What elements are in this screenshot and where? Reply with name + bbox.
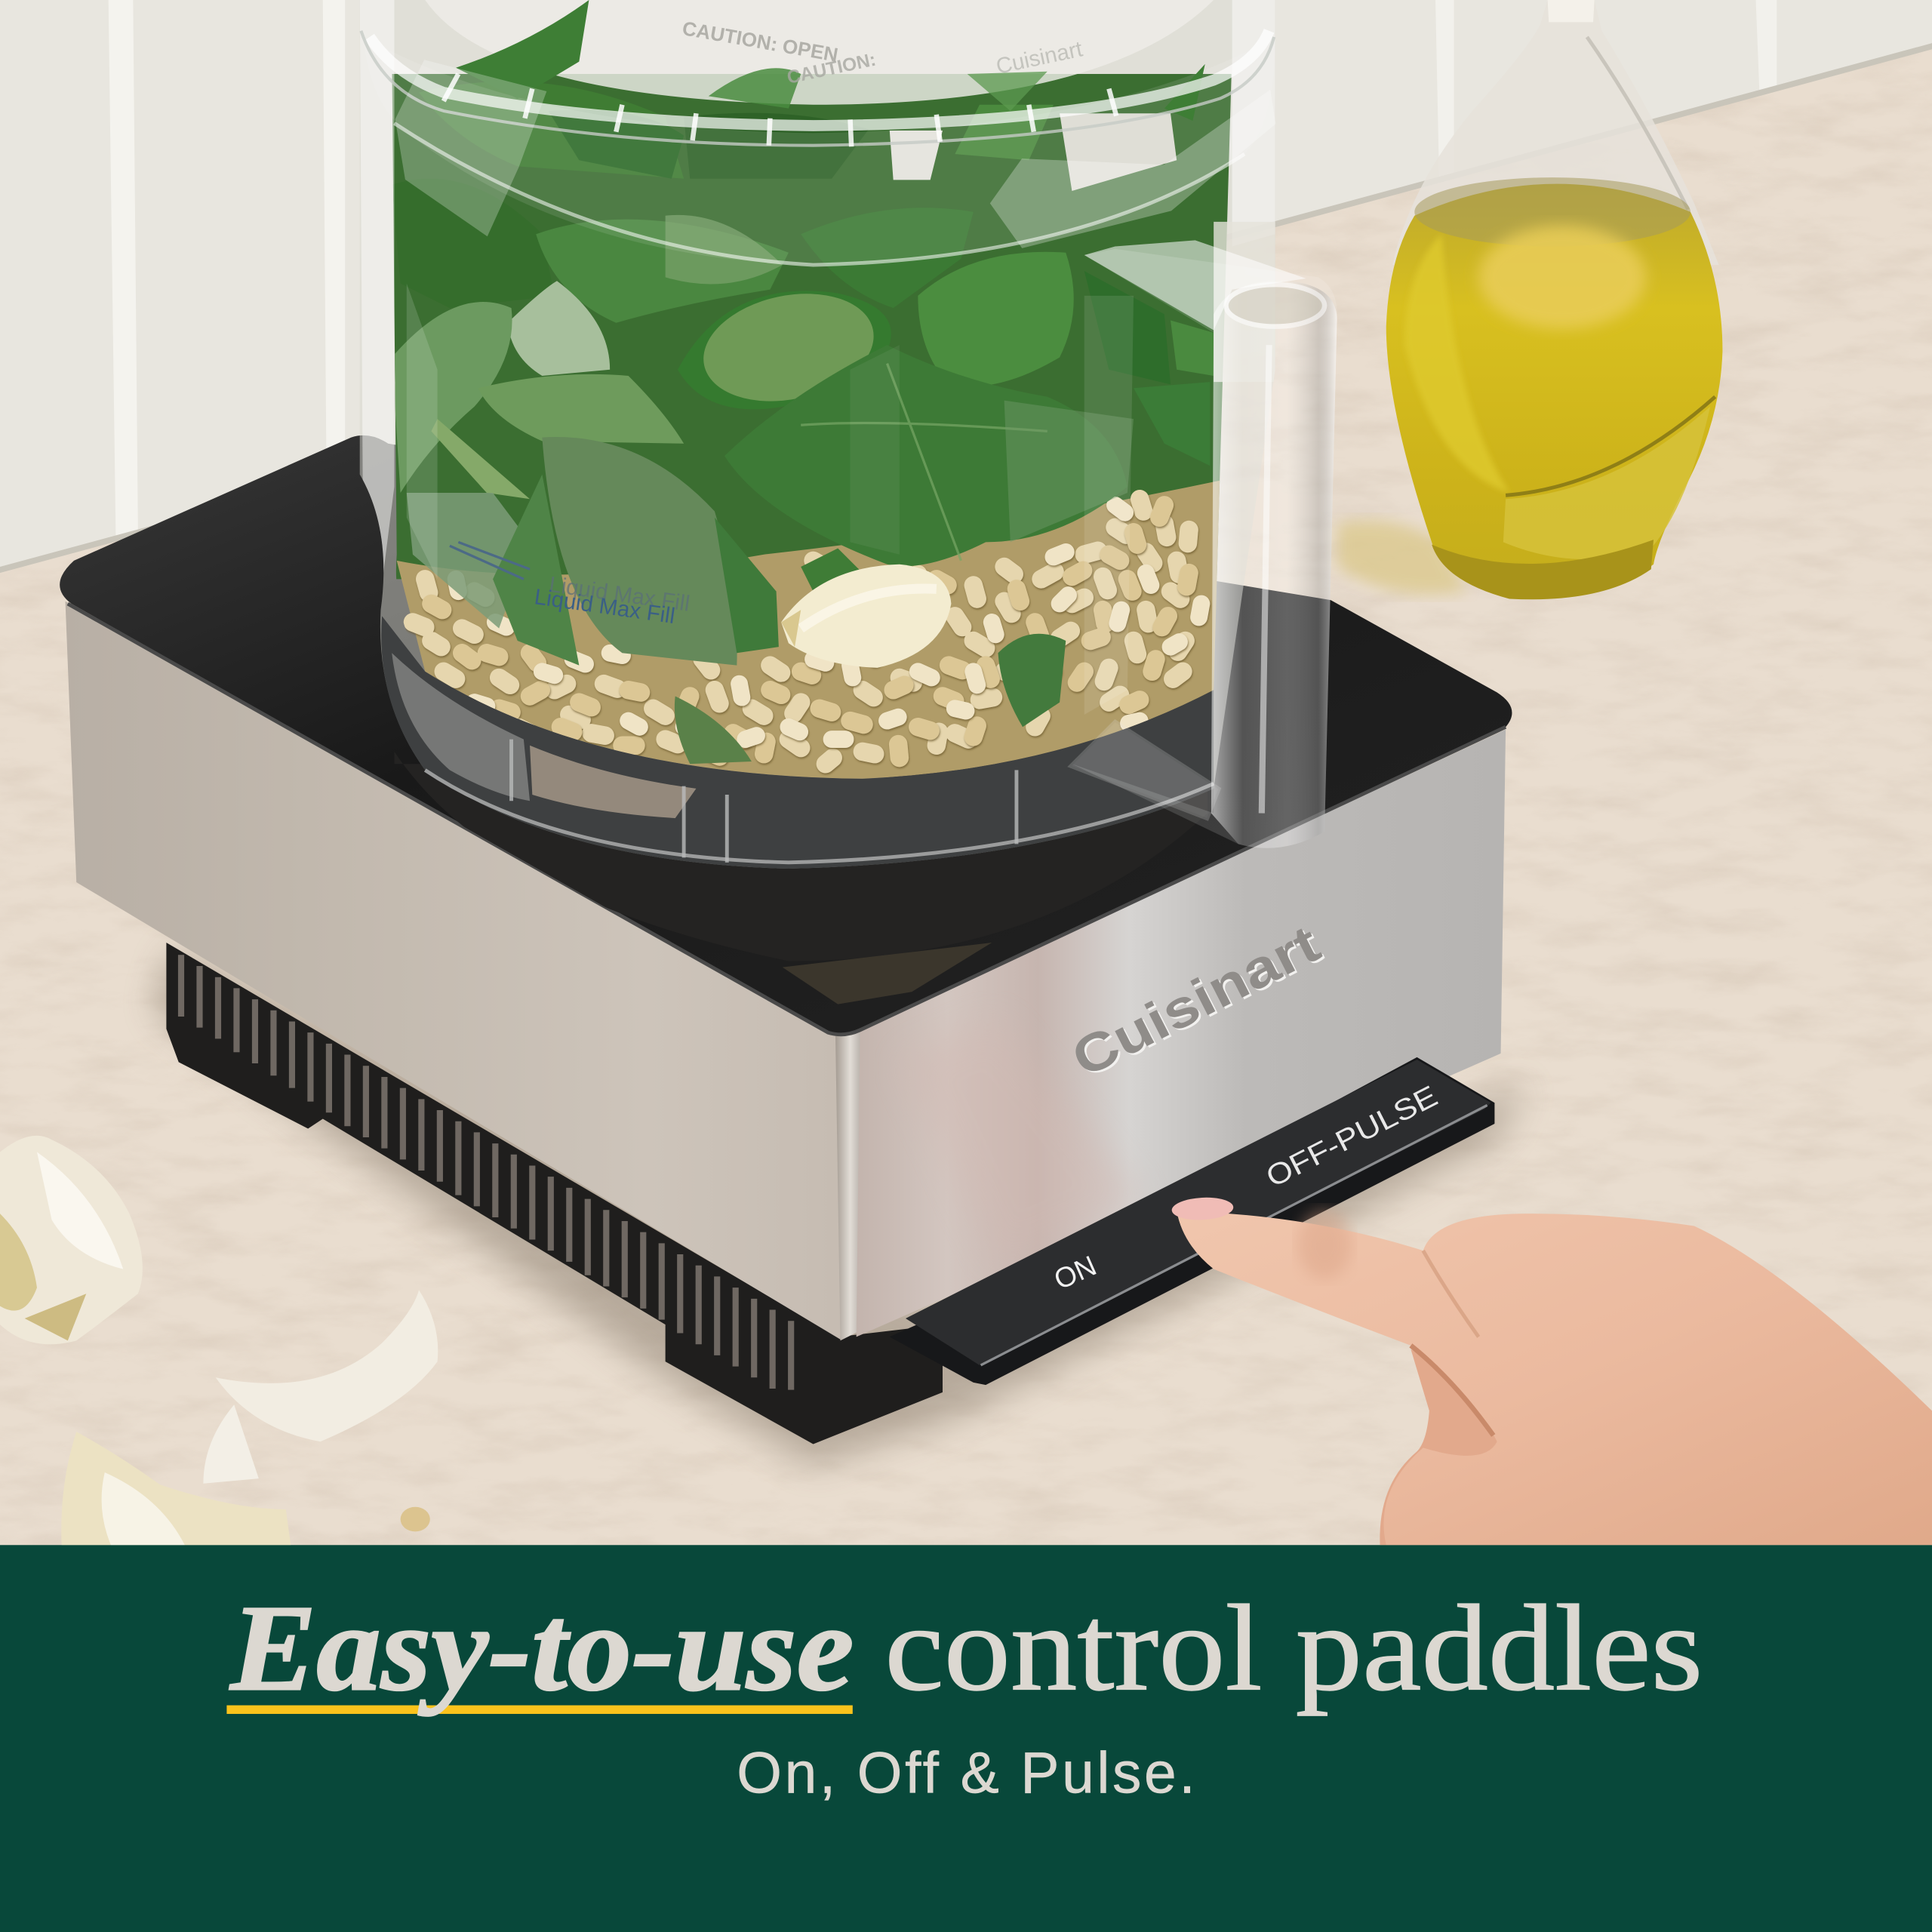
leaves through lid [456,0,589,99]
work bowl with pesto ingredients [360,0,1337,869]
green banner [0,1545,1932,1932]
curved skin [216,1290,438,1441]
appliance shadow on counter [154,949,1527,1466]
curled basil leaf [678,291,891,409]
OFF-PULSE label: OFF-PULSE [1261,1080,1443,1194]
vented underside with feet [166,943,943,1444]
olive oil bottle [1337,0,1722,599]
liquid max fill marking: Liquid Max Fill [548,572,691,617]
food processor base [60,435,1512,1444]
bowl background [360,0,1275,869]
brushed steel right face [857,730,1506,1337]
reflection band [1506,397,1715,495]
glass neck and shoulder [1392,0,1719,265]
top leaves [419,82,684,179]
lid [361,0,1275,265]
oil highlight [1478,226,1646,329]
lower garlic piece [61,1432,291,1545]
pine nuts tone A [413,499,1189,764]
bottle shadow [1337,520,1466,595]
marble countertop [0,0,1932,1545]
headline: Easy-to-use [229,1580,854,1716]
chopped basil sprig [801,549,863,592]
lid rim [370,31,1269,126]
lid opening [425,0,1214,105]
control paddle [890,1057,1494,1385]
bowl dark lower ring [381,616,1214,869]
pale left leaves [508,281,610,376]
pine nuts tone C [456,505,1201,740]
bottle foot [1432,540,1654,599]
black glossy top [60,435,1512,1034]
left lid tab [397,62,545,234]
steel corner [835,1025,865,1340]
garlic clove [781,565,951,668]
lid: Cuisinart [994,36,1084,79]
oil body [1386,184,1722,598]
brand logo: Cuisinart [1065,915,1331,1090]
reflection streak [900,1017,1146,1269]
oil surface [1414,177,1690,247]
caution imprint: CAUTION: OPEN [681,17,840,66]
garlic bulb piece [0,1136,143,1344]
reflection of bowl [394,752,992,1004]
leaf mass [392,74,1232,579]
liquid max fill marking [450,542,691,629]
large centre basil leaf [724,345,1128,566]
lid: CAUTION: [786,50,878,88]
bowl feed handle [1069,240,1337,848]
right lid tab [992,92,1274,247]
headline underline [226,1706,853,1714]
small skin [203,1404,259,1484]
hand pressing paddle [1171,1196,1932,1545]
bowl side reflections [360,0,1275,715]
small basil leaf in nuts [675,696,752,764]
thumb crease [1423,1251,1478,1337]
knuckle shadow [1297,1210,1352,1279]
right side leaves [1084,271,1171,384]
basil leaf top centre [536,220,789,323]
lid ribs [444,74,1116,146]
lid translucent band [364,37,1275,265]
subtitle: On, Off & Pulse. [737,1742,1195,1806]
pine nut bed [397,481,1220,779]
headline continuation: control paddles [884,1580,1703,1716]
gaps between upper leaves [890,131,943,180]
fingernail [1171,1196,1234,1221]
stray pine nut [401,1507,430,1531]
curled fingers and thumb [1380,1349,1527,1545]
garlic skins [0,1136,438,1545]
brushed steel left face [66,601,840,1340]
hand and index finger [1177,1211,1932,1545]
top edge highlight [68,604,1506,1035]
brand logo: Cuisinart [1063,913,1329,1088]
liquid max fill marking: Liquid Max Fill [533,584,676,629]
ON label: ON [1049,1249,1101,1296]
kitchen wall [0,0,1932,575]
food contents [392,74,1232,779]
pine nuts tone B [431,505,1189,758]
